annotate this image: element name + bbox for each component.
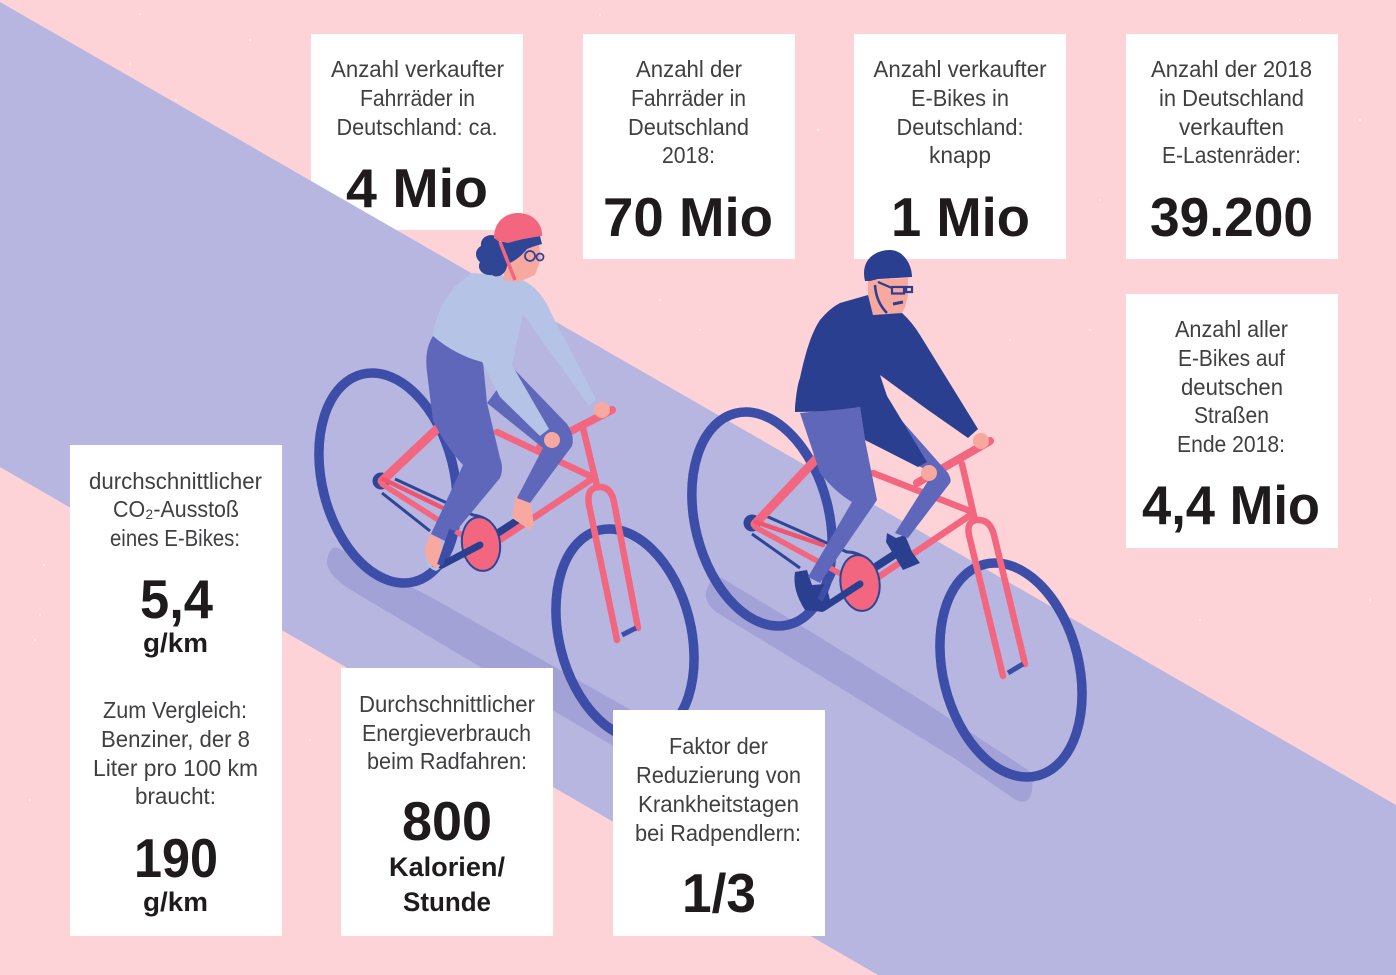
head <box>476 213 544 282</box>
helmet <box>864 250 912 281</box>
far crank <box>877 553 897 566</box>
stat box: Fahrräder gesamt: Anzahl der <box>636 56 742 82</box>
cyclist: woman <box>298 213 715 754</box>
crank <box>440 545 480 566</box>
stat box: Krankheitstage: Krankheitstagen <box>638 791 799 817</box>
stat box: Fahrräder verkauft <box>311 34 523 230</box>
back foot <box>512 495 534 530</box>
helmet strap <box>500 242 515 280</box>
stat box: Energieverbrauch: beim Radfahren: <box>367 748 527 774</box>
pedal strap <box>820 573 833 600</box>
stat box: CO2-Ausstoß: eines E-Bikes: <box>110 525 240 551</box>
stat box: Energieverbrauch: 800 <box>402 790 492 852</box>
front leg <box>426 336 502 542</box>
stat box: Energieverbrauch: Kalorien/ <box>389 852 505 882</box>
stat box: E-Lastenräder: in Deutschland <box>1159 85 1304 111</box>
stat box: Energieverbrauch: Energieverbrauch <box>362 720 531 746</box>
stat box: CO2-Ausstoß: Liter pro 100 km <box>93 755 258 781</box>
chainring <box>837 553 883 613</box>
back leg <box>865 404 951 538</box>
stat box: Energieverbrauch <box>341 668 553 936</box>
cyclist: man <box>671 250 1103 792</box>
stat box: Krankheitstage: Reduzierung von <box>636 762 801 788</box>
stat box: CO2-Ausstoß: Benziner, der 8 <box>101 726 250 752</box>
stat box: Fahrräder gesamt: Deutschland <box>628 114 749 140</box>
bike frame <box>755 441 1025 676</box>
hands <box>973 433 989 449</box>
stat box: CO2-Ausstoß: g/km <box>143 628 208 658</box>
shadow of first cyclist <box>327 548 640 762</box>
stat box: Energieverbrauch: Durchschnittlicher <box>359 691 535 717</box>
sweater <box>795 295 978 467</box>
hair <box>476 235 542 276</box>
chainring <box>458 515 504 573</box>
stat box: CO2-Ausstoß: CO₂-Ausstoß <box>113 496 239 522</box>
stat box: Krankheitstage: Faktor der <box>669 733 768 759</box>
back leg <box>487 368 573 503</box>
stat box: E-Lastenräder: E-Lastenräder: <box>1162 142 1301 168</box>
stat box: Krankheitstage: bei Radpendlern: <box>635 820 801 846</box>
stat box: E-Bikes auf Straßen: E-Bikes auf <box>1178 345 1286 371</box>
stat box: Fahrräder gesamt: Fahrräder in <box>631 85 746 111</box>
stat box: Krankheitstage: 1/3 <box>682 862 756 924</box>
stat box: E-Bikes verkauft: Anzahl verkaufter <box>874 56 1047 82</box>
rear wheel <box>671 397 853 641</box>
rear wheel <box>298 358 478 598</box>
stat box: Fahrräder verkauft: Fahrräder in <box>360 85 475 111</box>
stat box: E-Bikes auf Straßen: 4,4 Mio <box>1142 474 1320 536</box>
stat box: CO2-Ausstoß <box>70 445 282 936</box>
stat box: E-Bikes verkauft: Deutschland: <box>896 114 1024 140</box>
glasses <box>878 282 912 294</box>
back shoe <box>886 533 920 570</box>
far crank and pedal <box>497 521 517 534</box>
stat box: E-Bikes verkauft: 1 Mio <box>891 186 1030 248</box>
stat box: E-Bikes verkauft <box>854 34 1066 259</box>
stat box: E-Bikes verkauft: E-Bikes in <box>911 85 1009 111</box>
helmet strap <box>875 285 887 313</box>
stat box: CO2-Ausstoß: g/km <box>143 887 208 917</box>
stat box: CO2-Ausstoß: 190 <box>134 827 218 889</box>
neck and face <box>868 278 908 315</box>
moustache <box>893 302 903 304</box>
pedal strap <box>440 530 452 565</box>
front axle <box>1008 664 1023 673</box>
front foot <box>425 534 443 569</box>
stat box: E-Lastenräder: verkauften <box>1179 114 1284 140</box>
hands <box>594 402 610 418</box>
front wheel <box>919 548 1103 792</box>
shadow of second cyclist <box>706 577 1032 802</box>
stat box: Energieverbrauch: Stunde <box>403 887 491 917</box>
stat box: Fahrräder gesamt <box>583 34 795 259</box>
stat box: CO2-Ausstoß: braucht: <box>135 783 216 809</box>
front axle <box>622 628 636 635</box>
chain <box>382 479 490 531</box>
front wheel <box>535 514 715 754</box>
stat box: Fahrräder verkauft: 4 Mio <box>346 157 488 219</box>
glasses <box>525 251 544 261</box>
stat box: E-Lastenräder: 39.200 <box>1150 186 1313 248</box>
stat box: Krankheitstage <box>613 710 825 936</box>
stat box: E-Bikes auf Straßen <box>1126 294 1338 548</box>
front shoe <box>794 570 830 612</box>
stat box: CO2-Ausstoß: durchschnittlicher <box>89 468 262 494</box>
stat box: CO2-Ausstoß: 5,4 <box>140 568 213 630</box>
stat box: E-Bikes auf Straßen: Anzahl aller <box>1175 316 1288 342</box>
stat box: E-Bikes auf Straßen: Ende 2018: <box>1177 431 1285 457</box>
stat box: Fahrräder gesamt: 2018: <box>662 142 715 168</box>
head details <box>864 250 912 313</box>
stat box: CO2-Ausstoß: Zum Vergleich: <box>103 697 247 723</box>
stat box: Fahrräder verkauft: Anzahl verkaufter <box>331 56 504 82</box>
stat box: Fahrräder verkauft: Deutschland: ca. <box>336 114 498 140</box>
sweater <box>433 273 596 436</box>
stat box: E-Bikes auf Straßen: deutschen <box>1181 374 1283 400</box>
stat box: E-Lastenräder <box>1126 34 1338 259</box>
helmet <box>494 213 542 243</box>
stat box: E-Lastenräder: Anzahl der 2018 <box>1151 56 1312 82</box>
stat box: E-Bikes auf Straßen: Straßen <box>1194 402 1269 428</box>
stat box: Fahrräder gesamt: 70 Mio <box>603 186 773 248</box>
crank <box>823 584 860 608</box>
stat box: E-Bikes verkauft: knapp <box>929 142 991 168</box>
chain <box>752 516 868 568</box>
front leg <box>800 407 877 583</box>
bike frame <box>382 410 638 640</box>
